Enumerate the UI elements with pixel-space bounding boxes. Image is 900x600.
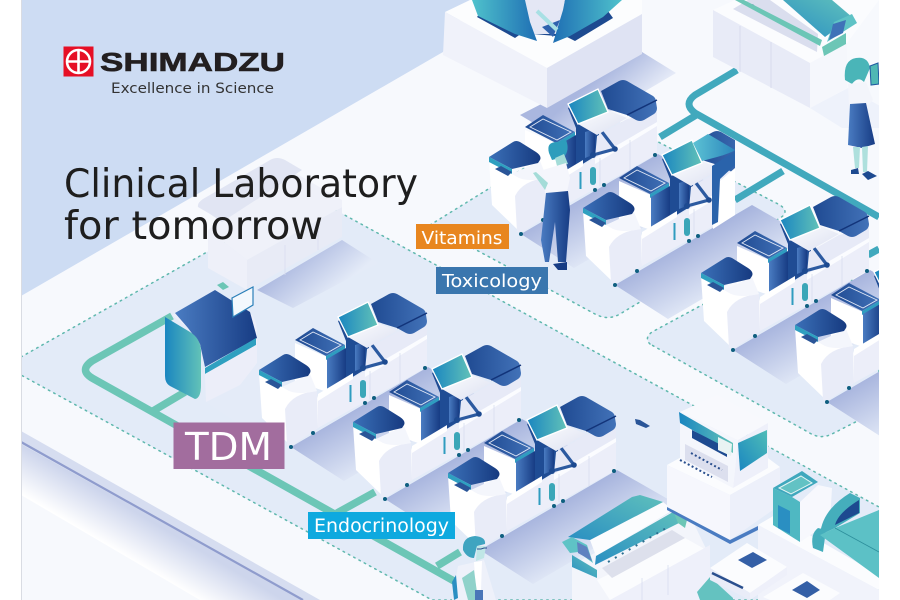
conveyor line: upper teal: [660, 70, 879, 255]
TDM analyzer: [165, 282, 300, 428]
teal rounded machine: [812, 528, 826, 552]
label: Endocrinology: Endocrinology: [314, 516, 449, 537]
top block instrument: [443, 0, 676, 140]
logo: Shimadzu: [64, 46, 285, 97]
pedestal instrument: [667, 395, 780, 544]
teal box: [800, 485, 832, 542]
bottom right boxes: [697, 543, 840, 600]
book base dark edge: [477, 0, 613, 41]
floor edge strip: [21, 431, 320, 600]
brand name: SHIMADZU: [100, 47, 285, 77]
icon: left teal leaf: [472, 0, 537, 41]
man with glasses: [452, 536, 496, 600]
analyzer unit 7: lower row: [448, 396, 673, 584]
bottom instrument: [562, 495, 710, 600]
label: Endocrinology: [308, 512, 455, 539]
icon: red logo square: [64, 46, 94, 76]
label: TDM: TDM: [184, 425, 272, 469]
small screen: [232, 287, 253, 317]
woman with tablet: [845, 58, 879, 180]
label: Toxicology: Toxicology: [441, 271, 542, 292]
right module cover: [693, 134, 735, 161]
title: Clinical Laboratory: [64, 162, 418, 207]
title: for tomorrow: [64, 204, 323, 249]
tagline: Excellence in Science: [111, 81, 274, 97]
analyzer unit 6: lower row: [353, 345, 578, 533]
analyzer unit 3: right row: [701, 196, 900, 384]
zone: lower lab floor: [21, 195, 879, 600]
label: Vitamins: Vitamins: [422, 228, 502, 249]
conveyor line: lower green: [86, 316, 470, 590]
analyzer unit 1: upper row: [489, 80, 714, 268]
woman at analyzer: [533, 140, 570, 270]
analyzer unit 5: lower row: [259, 293, 484, 481]
dropped shoe icon: [635, 419, 650, 428]
top right instrument: [713, 0, 880, 128]
background blue wall: [21, 0, 470, 296]
label: Toxicology: [436, 267, 548, 294]
right platform machines: [758, 471, 879, 600]
analyzer unit 2: with teal module: [583, 131, 808, 319]
zone: right lab floor: [647, 252, 879, 437]
analyzer unit 4: right row cut off: [795, 248, 900, 436]
right module white column: [713, 168, 735, 229]
icon: right teal leaf: [553, 0, 622, 43]
right module blue column: [712, 151, 735, 225]
zone: upper lab floor: [430, 118, 785, 318]
pale instrument behind title: [198, 158, 378, 308]
